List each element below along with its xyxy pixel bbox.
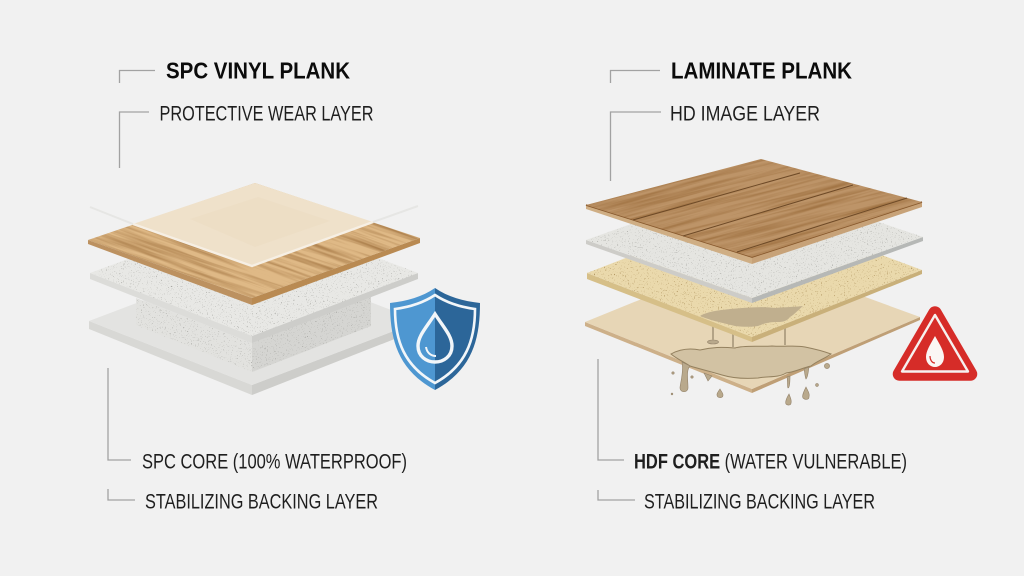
label: SPC backing layer: STABILIZING BACKING LAYER xyxy=(145,490,378,514)
diagram: laminate layer stack xyxy=(585,159,923,406)
heading: laminate plank xyxy=(610,58,852,84)
icon: water warning triangle xyxy=(900,313,970,374)
layer: backing sheet with puddle xyxy=(585,255,920,393)
diagram: SPC layer stack xyxy=(88,183,420,395)
heading: laminate plank: LAMINATE PLANK xyxy=(671,58,852,84)
layer: wood decor with clear wear layer xyxy=(88,183,420,305)
label: protective wear layer xyxy=(120,102,374,168)
label: laminate backing layer xyxy=(598,490,875,514)
layer: SPC core block xyxy=(136,296,371,372)
layer: HDF core with water stain xyxy=(587,208,922,342)
layer: backing sheet xyxy=(89,258,420,395)
label: protective wear layer: PROTECTIVE WEAR LAYER xyxy=(160,102,374,126)
panel: laminate plank xyxy=(566,58,970,514)
heading: SPC vinyl plank: SPC VINYL PLANK xyxy=(166,58,350,84)
label: HDF core xyxy=(598,359,907,474)
icon: waterproof shield xyxy=(390,288,480,390)
layer: oak decor planks xyxy=(586,159,922,264)
layer: SPC core top slab xyxy=(90,212,418,343)
label: HD image layer: HD IMAGE LAYER xyxy=(670,102,820,126)
label: laminate backing layer: STABILIZING BACKING LAYER xyxy=(644,490,875,514)
water drips xyxy=(671,323,830,405)
label: SPC core: SPC CORE (100% WATERPROOF) xyxy=(142,450,407,474)
label: HD image layer xyxy=(610,102,820,181)
label: HDF core: HDF CORE (WATER VULNERABLE) xyxy=(634,450,907,474)
label: SPC backing layer xyxy=(108,489,378,514)
layer: white middle layer xyxy=(586,180,923,303)
panel: SPC vinyl plank xyxy=(68,58,480,514)
label: SPC core xyxy=(108,368,407,474)
